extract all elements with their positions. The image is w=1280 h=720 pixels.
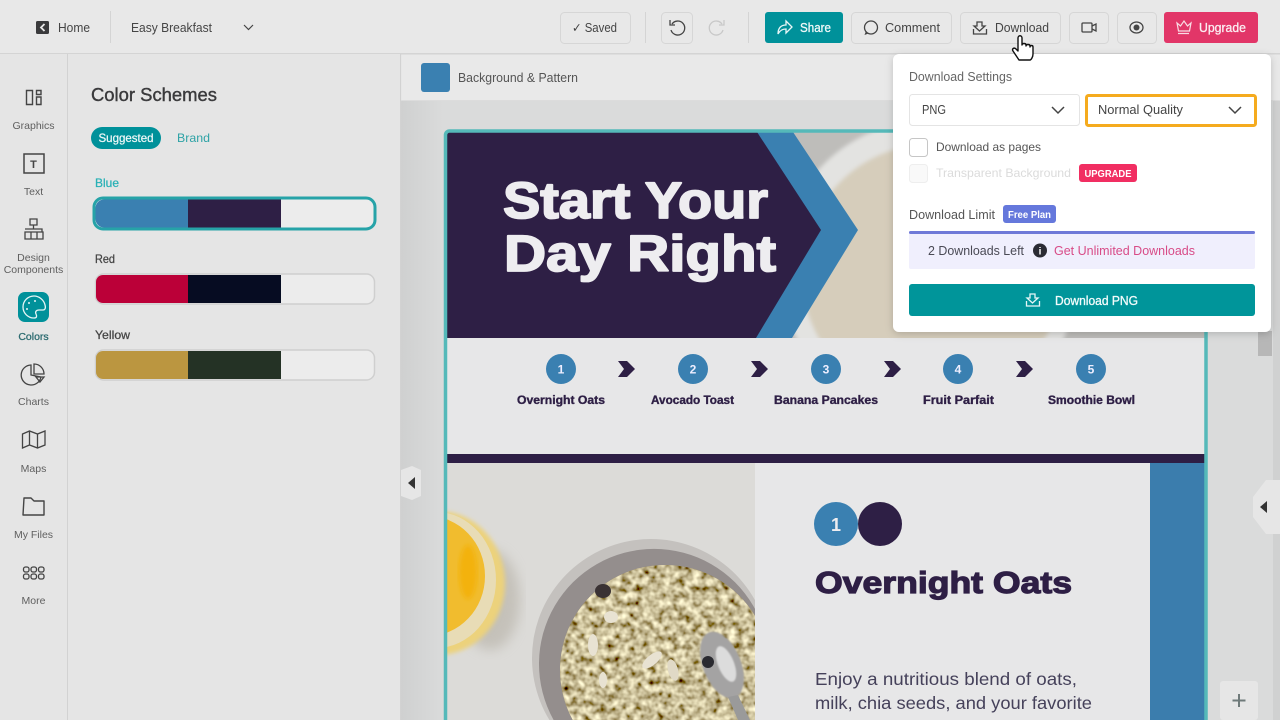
download settings popup xyxy=(893,54,1271,332)
arrow xyxy=(751,361,768,377)
step 2: 2 xyxy=(690,362,697,376)
pages checkbox: Download as pages xyxy=(936,140,1041,154)
banner purple panel xyxy=(447,132,821,338)
format select: PNG xyxy=(922,103,946,117)
comment button xyxy=(852,12,952,44)
my files item xyxy=(14,498,53,541)
download limit label: Download Limit xyxy=(909,208,996,222)
red scheme: Red xyxy=(95,252,115,266)
preview button xyxy=(1118,12,1156,44)
graphics item: Graphics xyxy=(12,120,55,132)
arrow xyxy=(884,361,901,377)
blue scheme: Blue xyxy=(95,176,119,190)
breakfast photo xyxy=(447,463,755,720)
more item: More xyxy=(22,595,46,607)
quality select: Normal Quality xyxy=(1098,103,1184,117)
banner photo xyxy=(792,132,1204,338)
recipe steps row xyxy=(517,354,1135,407)
toolbar label: Background & Pattern xyxy=(458,71,578,85)
recipe description xyxy=(815,669,1092,713)
number badges xyxy=(814,502,902,546)
step 1: 1 xyxy=(558,362,565,376)
red scheme xyxy=(95,252,374,304)
background and pattern toolbar xyxy=(401,54,1280,101)
design components item xyxy=(4,219,63,276)
quality select xyxy=(1086,96,1256,126)
panel heading: Color Schemes xyxy=(91,84,217,105)
step 5: 5 xyxy=(1088,362,1095,376)
step 2: Avocado Toast xyxy=(651,395,734,407)
download png button xyxy=(909,284,1255,316)
design components item: Design xyxy=(17,252,50,264)
upgrade badge xyxy=(1079,164,1137,182)
hand cursor xyxy=(1013,36,1033,60)
suggested tab: Suggested xyxy=(98,131,154,145)
maps item: Maps xyxy=(21,463,46,475)
zoom in button xyxy=(1220,681,1258,720)
transparent checkbox xyxy=(910,164,1071,182)
video button xyxy=(1070,12,1108,44)
text item: Text xyxy=(24,186,43,198)
yellow scheme xyxy=(95,328,374,380)
my files item: My Files xyxy=(14,529,53,541)
colors item, selected xyxy=(18,292,49,343)
downloads left box: 2 Downloads Left xyxy=(928,244,1025,258)
home link xyxy=(36,20,90,35)
arrow xyxy=(1016,361,1033,377)
format select xyxy=(910,94,1080,126)
banner blue chevron xyxy=(700,132,858,338)
yellow scheme: Yellow xyxy=(95,328,130,342)
recipe heading: Overnight Oats xyxy=(815,565,1072,600)
brand tab: Brand xyxy=(177,131,210,145)
blue scheme xyxy=(94,176,375,229)
recipe text panel xyxy=(814,502,1092,713)
upgrade button xyxy=(1164,12,1258,43)
charts item xyxy=(18,364,49,408)
saved button: ✓ Saved xyxy=(572,21,617,35)
download png button: Download PNG xyxy=(1055,294,1138,308)
right panel collapse tab xyxy=(1253,480,1280,534)
settings heading: Download Settings xyxy=(909,70,1012,84)
redo button xyxy=(709,20,724,35)
text item: T xyxy=(30,159,37,171)
left navigation rail xyxy=(0,54,68,720)
step 1 xyxy=(517,354,605,407)
background color swatch xyxy=(421,63,450,92)
transparent checkbox: Transparent Background xyxy=(936,166,1071,180)
infographic page xyxy=(447,132,1204,720)
charts item: Charts xyxy=(18,396,49,408)
step 3 xyxy=(774,354,878,407)
color schemes panel xyxy=(68,54,401,720)
canvas workspace xyxy=(401,54,1280,720)
step 3: Banana Pancakes xyxy=(774,395,878,407)
downloads left box xyxy=(909,231,1255,269)
step 2 xyxy=(651,354,734,407)
saved button xyxy=(560,12,630,44)
divider bar xyxy=(447,454,1205,463)
upgrade button: Upgrade xyxy=(1199,21,1246,35)
selection outline xyxy=(446,131,1206,720)
suggested tab xyxy=(91,127,161,149)
title: Day Right xyxy=(504,225,776,282)
recipe description: Enjoy a nutritious blend of oats, xyxy=(815,669,1077,689)
download button: Download xyxy=(995,21,1049,35)
comment button: Comment xyxy=(885,21,941,35)
step 4: 4 xyxy=(955,362,962,376)
page background xyxy=(447,132,1205,720)
more item xyxy=(22,567,46,607)
undo button xyxy=(662,12,692,44)
step 5: Smoothie Bowl xyxy=(1048,395,1135,407)
recipe description: milk, chia seeds, and your favorite xyxy=(815,693,1092,713)
download button xyxy=(960,12,1060,44)
upgrade badge: UPGRADE xyxy=(1084,168,1132,180)
share button: Share xyxy=(800,21,831,35)
graphics item xyxy=(12,90,55,132)
document name: Easy Breakfast xyxy=(131,20,212,35)
arrow xyxy=(618,361,635,377)
title xyxy=(503,172,776,282)
number badges: 1 xyxy=(831,515,841,535)
scrollbar thumb xyxy=(1258,331,1272,356)
step 5 xyxy=(1048,354,1135,407)
title: Start Your xyxy=(503,172,768,229)
text item xyxy=(24,154,44,198)
colors item, selected: Colors xyxy=(18,331,49,343)
step 1: Overnight Oats xyxy=(517,395,605,407)
step 4: Fruit Parfait xyxy=(923,395,994,407)
downloads left box: Get Unlimited Downloads xyxy=(1054,244,1195,258)
design components item: Components xyxy=(4,264,63,276)
blue side stripe xyxy=(1150,463,1205,720)
left panel collapse tab xyxy=(401,466,421,500)
maps item xyxy=(21,431,46,475)
free plan badge xyxy=(1003,205,1056,223)
free plan badge: Free Plan xyxy=(1008,209,1051,221)
home link: Home xyxy=(58,20,90,35)
top bar xyxy=(0,0,1280,54)
step 3: 3 xyxy=(823,362,830,376)
pages checkbox xyxy=(910,138,1041,156)
step 4 xyxy=(923,354,994,407)
share button xyxy=(765,12,843,43)
downloads left box: i xyxy=(1039,246,1042,258)
